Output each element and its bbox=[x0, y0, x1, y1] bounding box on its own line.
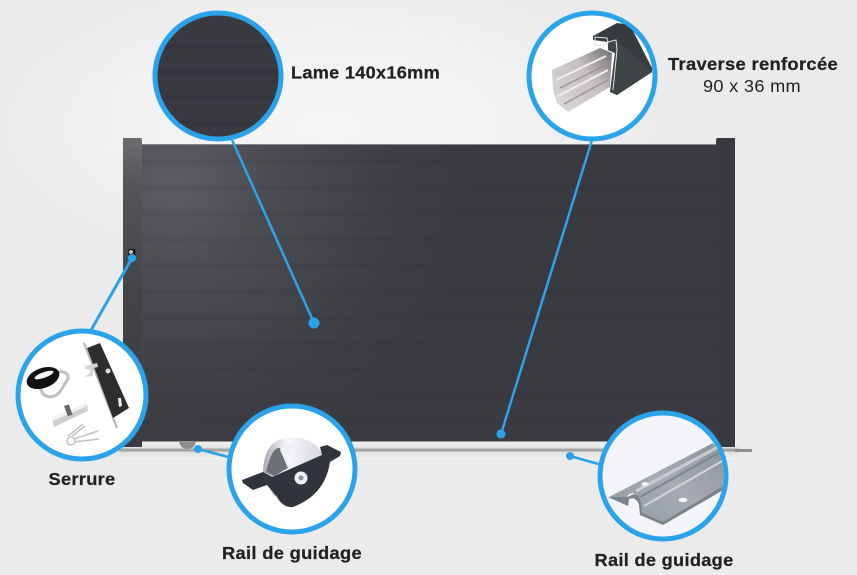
keys bbox=[67, 424, 99, 445]
wheel bbox=[242, 437, 341, 507]
gate bbox=[119, 138, 752, 460]
callout: traverse bbox=[529, 13, 838, 139]
connector: rail bbox=[566, 452, 602, 465]
galet label: Rail de guidage bbox=[222, 543, 362, 563]
rail circle bbox=[600, 413, 726, 539]
callout: galet bbox=[222, 406, 362, 563]
lock plate bbox=[84, 343, 117, 428]
wheel bracket bbox=[242, 445, 341, 507]
connector: galet bbox=[194, 445, 232, 458]
callout: lame bbox=[150, 13, 440, 139]
callout: rail bbox=[594, 413, 734, 570]
connector: traverse bbox=[496, 140, 592, 438]
callout: serrure bbox=[18, 331, 146, 489]
lock body bbox=[87, 343, 129, 418]
rail label: Rail de guidage bbox=[594, 550, 734, 570]
lame slats bbox=[157, 43, 279, 126]
traverse circle bbox=[529, 13, 655, 139]
lock parts bbox=[24, 343, 129, 445]
traverse label: Traverse renforcée bbox=[668, 54, 838, 74]
serrure circle bbox=[18, 331, 146, 459]
left post bbox=[123, 138, 142, 447]
gate panel bbox=[123, 144, 735, 442]
serrure label: Serrure bbox=[48, 469, 116, 489]
right post bbox=[716, 138, 735, 447]
escutcheon bbox=[40, 372, 68, 397]
connector: serrure bbox=[90, 254, 136, 332]
lame label: Lame 140x16mm bbox=[291, 62, 440, 82]
traverse label bbox=[668, 54, 838, 96]
lock cylinder bbox=[128, 249, 136, 260]
ground rail bbox=[119, 441, 752, 460]
rail photo bbox=[608, 443, 725, 525]
traverse label: 90 x 36 mm bbox=[703, 76, 801, 96]
lame circle bbox=[155, 13, 281, 139]
traverse photo bbox=[552, 23, 652, 112]
connector: lame bbox=[232, 140, 320, 328]
cylinder bbox=[52, 403, 88, 427]
galet circle bbox=[229, 406, 355, 532]
